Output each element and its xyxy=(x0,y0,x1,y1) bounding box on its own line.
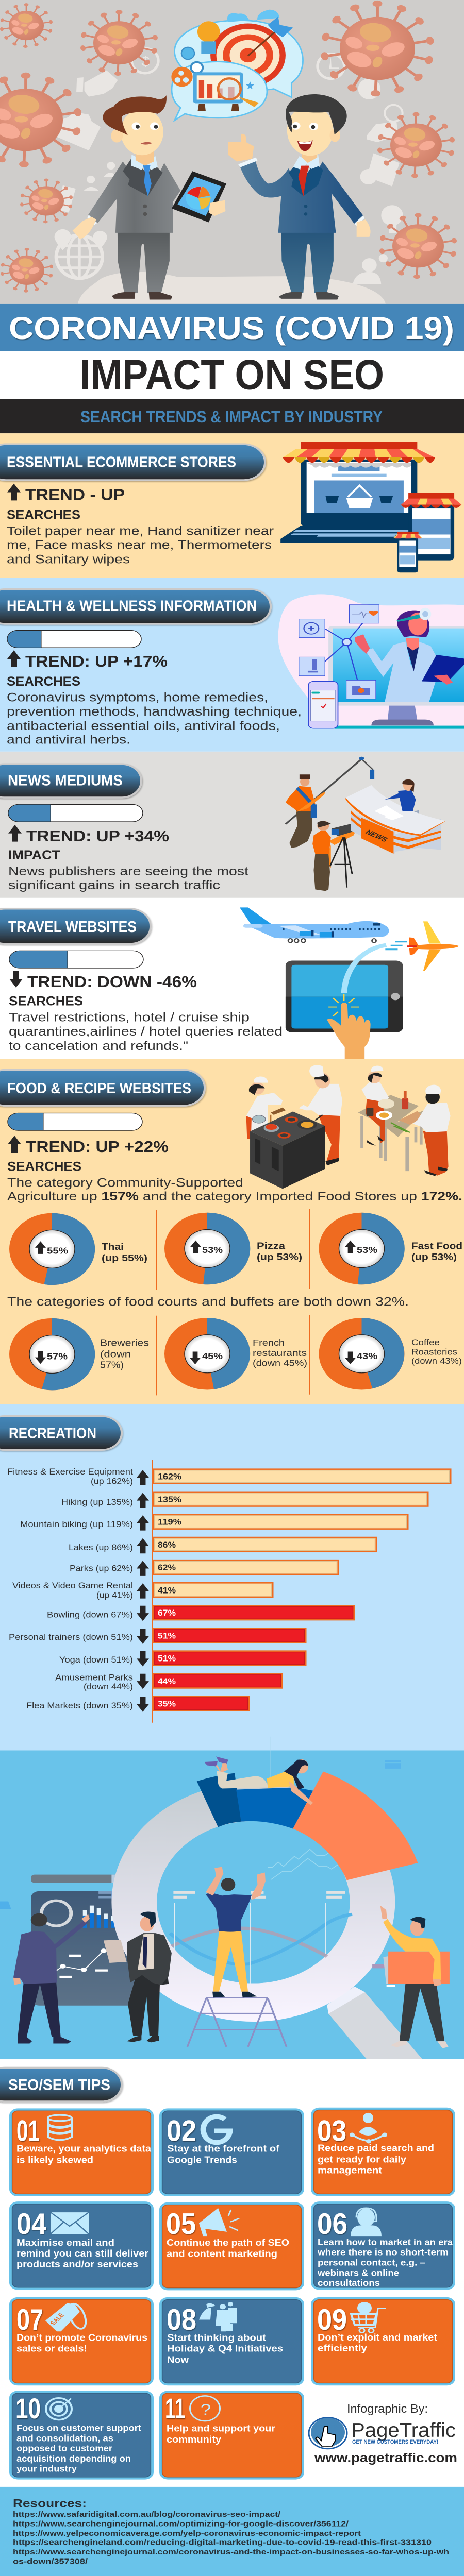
donut: French restaurants: restaurants xyxy=(253,1348,307,1358)
bar chart: Hiking (up 135%) xyxy=(61,1497,133,1507)
bar chart: 51% xyxy=(158,1653,176,1663)
panel: resources: https://www.yelpeconomicaverage.com/yelp-coronavirus-economic-impact-report xyxy=(13,2529,361,2537)
tip 01: is likely skewed xyxy=(16,2155,93,2165)
icon: megaphone xyxy=(199,2208,239,2236)
icon: chefs cooking xyxy=(246,1065,451,1189)
donut: French restaurants: French xyxy=(253,1337,285,1348)
text: food courts: The categories of food courts and buffets are both down 32%. xyxy=(7,1295,409,1309)
heading pill xyxy=(0,1070,205,1106)
figure: man on ladder xyxy=(187,1867,287,2047)
icon: target xyxy=(46,2398,72,2420)
icon: news crew and desk xyxy=(286,757,445,891)
tip 02 xyxy=(161,2110,303,2195)
panel: magnifier illustration xyxy=(0,1737,464,2059)
bar chart xyxy=(7,1460,451,1723)
icon: sale tag xyxy=(45,2302,89,2331)
heading pill: HEALTH & WELLNESS INFORMATION xyxy=(7,598,257,614)
heading pill xyxy=(0,764,141,798)
panel: health and wellness xyxy=(0,578,464,752)
donut: Breweries: (down xyxy=(100,1349,131,1360)
trend: TREND: DOWN -46% xyxy=(27,974,197,991)
donut: Coffee Roasteries xyxy=(319,1318,462,1389)
tip 01 xyxy=(10,2110,153,2195)
searches text: to cancelation and refunds." xyxy=(9,1039,188,1053)
tip 03: management xyxy=(318,2165,382,2176)
tip 03: get ready for daily xyxy=(318,2155,407,2165)
heading pill xyxy=(0,444,265,480)
heading pill: FOOD & RECIPE WEBSITES xyxy=(7,1080,191,1096)
heading pill: RECREATION xyxy=(9,1425,96,1442)
icon: online store devices xyxy=(280,442,461,572)
bar chart: Mountain biking (up 119%) xyxy=(20,1519,133,1529)
bar chart: (up 162%) xyxy=(91,1476,133,1486)
tip 07: Don’t promote Coronavirus xyxy=(16,2333,147,2343)
tip 02: Google Trends xyxy=(167,2155,237,2165)
searches text: Travel restrictions, hotel / cruise ship xyxy=(9,1010,250,1024)
donut: Breweries: 57%) xyxy=(100,1360,124,1370)
panel: resources: https://www.searchenginejournal.com/optimizing-for-google-discover/356112/ xyxy=(13,2519,349,2528)
panel: essential ecommerce stores xyxy=(0,433,464,578)
bar chart: 41% xyxy=(158,1585,176,1595)
tip 06: consultations xyxy=(318,2278,380,2289)
tip 05: 05 xyxy=(166,2208,196,2241)
figure: man at dashboard xyxy=(13,1913,90,2043)
searches text: SEARCHES xyxy=(7,1159,81,1174)
tip 07: sales or deals! xyxy=(16,2344,87,2354)
donut: Pizza xyxy=(164,1213,302,1284)
donut: Thai: 55% xyxy=(47,1246,68,1256)
donut: Breweries: Breweries xyxy=(100,1338,149,1348)
bar chart: 119% xyxy=(158,1517,181,1527)
tip 10: Focus on customer support xyxy=(16,2423,142,2433)
tip 04: Maximise email and xyxy=(16,2238,114,2248)
tip 04: remind you can still deliver xyxy=(16,2248,148,2259)
searches text: Agriculture up 157% and the category Imported Food Stores up 172%. xyxy=(7,1189,462,1204)
bar chart: Fitness & Exercise Equipment xyxy=(7,1467,133,1477)
icon: envelope xyxy=(51,2212,89,2234)
searches text: and Sanitary wipes xyxy=(7,552,130,566)
bar chart: Flea Markets (down 35%) xyxy=(26,1700,133,1710)
searches text: and antiviral herbs. xyxy=(7,733,130,747)
donut: Fast Food xyxy=(319,1213,462,1284)
bar chart: 86% xyxy=(158,1540,176,1550)
bar chart: Parks (up 62%) xyxy=(70,1563,133,1573)
tip 08: Holiday & Q4 Initiatives xyxy=(167,2344,283,2354)
trend: TREND: UP +34% xyxy=(26,827,169,845)
figure: man with orange box xyxy=(380,1906,450,2048)
tip 06: 06 xyxy=(317,2208,347,2241)
searches text: SEARCHES xyxy=(7,674,80,689)
tip 11: 11 xyxy=(165,2393,185,2425)
bar chart: 44% xyxy=(158,1676,176,1686)
searches text xyxy=(9,994,283,1053)
tip 10: and consolidation, as xyxy=(16,2433,113,2444)
searches text xyxy=(7,1159,462,1204)
bar chart: (up 41%) xyxy=(96,1590,133,1600)
icon: question mark: ? xyxy=(201,2401,211,2419)
icon: support doctor xyxy=(351,2208,382,2236)
figure: left businessman xyxy=(73,95,226,300)
figure: man with tablet xyxy=(104,1912,172,2042)
searches text: SEARCHES xyxy=(9,994,83,1008)
icon: plane and tablet xyxy=(240,907,459,1059)
tip 05: Continue the path of SEO xyxy=(167,2238,289,2248)
tip 03: 03 xyxy=(317,2115,346,2147)
chart: dashboard xyxy=(31,1875,145,2006)
tip 07 xyxy=(10,2298,153,2384)
tip 09: efficiently xyxy=(318,2343,368,2353)
donut: Coffee Roasteries: Coffee xyxy=(411,1337,440,1347)
heading pill xyxy=(0,909,151,944)
logo: PageTraffic credit: Infographic By: xyxy=(347,2402,428,2416)
tip 11: Help and support your xyxy=(167,2424,275,2434)
searches text xyxy=(7,674,302,747)
impact text: significant gains in search traffic xyxy=(8,878,220,892)
tip 10: acquisition depending on xyxy=(16,2454,131,2464)
donut: Coffee Roasteries: Roasteries xyxy=(411,1347,457,1357)
panel: hero xyxy=(0,0,464,304)
donut: Coffee Roasteries: 43% xyxy=(357,1351,377,1361)
impact text: IMPACT xyxy=(8,848,60,862)
subtitle band xyxy=(0,399,464,433)
tip 06: webinars & online xyxy=(317,2268,399,2278)
tip 06: personal contact, e.g. – xyxy=(318,2258,425,2268)
donut sectors on magnifier xyxy=(197,1771,418,1880)
trend: TREND: UP +22% xyxy=(26,1139,169,1156)
tip 10: 10 xyxy=(15,2393,41,2425)
heading pill xyxy=(0,589,271,624)
tip 11: community xyxy=(167,2435,222,2445)
icon: virus cells xyxy=(0,1,457,293)
tip 08: 08 xyxy=(167,2303,196,2336)
tip 08 xyxy=(161,2298,303,2384)
donut: French restaurants xyxy=(164,1318,307,1389)
tip 10 xyxy=(10,2392,153,2479)
panel: resources xyxy=(0,2487,464,2576)
searches text: Toilet paper near me, Hand sanitizer near xyxy=(7,524,274,538)
bar chart: 51% xyxy=(158,1631,176,1640)
heading pill: NEWS MEDIUMS xyxy=(8,772,123,789)
donut: Pizza: Pizza xyxy=(257,1241,286,1251)
bar chart: 135% xyxy=(158,1494,181,1504)
progress bar xyxy=(8,1113,142,1130)
bar chart: 62% xyxy=(158,1562,176,1572)
icon: shopping cart xyxy=(351,2302,386,2333)
donut: Pizza: 53% xyxy=(202,1245,223,1255)
panel: food and recipe websites xyxy=(0,1059,464,1404)
tip 11 xyxy=(161,2392,303,2479)
tip 04: 04 xyxy=(16,2208,46,2241)
tip 10: your industry xyxy=(16,2464,77,2474)
heading pill: SEO/SEM TIPS xyxy=(8,2076,110,2093)
tip 02: 02 xyxy=(167,2115,196,2147)
bar chart: Bowling (down 67%) xyxy=(47,1609,133,1619)
icon: logo hand xyxy=(309,2417,347,2449)
bar chart: Videos & Video Game Rental xyxy=(12,1581,133,1590)
searches text: quarantines,airlines / hotel queries related xyxy=(9,1024,283,1039)
progress bar xyxy=(8,804,143,822)
icon: news crew and desk: NEWS xyxy=(363,828,390,843)
trend: TREND - UP xyxy=(25,486,125,504)
donut: Thai xyxy=(9,1213,147,1285)
tip 08: Now xyxy=(167,2355,189,2365)
icon: database xyxy=(48,2115,72,2140)
searches text: The category Community-Supported xyxy=(7,1176,243,1190)
trend xyxy=(7,484,125,504)
bar chart: 67% xyxy=(158,1608,176,1618)
searches text: SEARCHES xyxy=(7,507,80,522)
donut: Thai: Thai xyxy=(102,1242,124,1252)
tip 02: Stay at the forefront of xyxy=(167,2144,279,2154)
panel: recreation xyxy=(0,1404,464,1750)
icon: holiday travellers xyxy=(199,2302,237,2331)
tip 10: opposed to customer xyxy=(16,2444,112,2454)
donut: Fast Food: Fast Food xyxy=(411,1241,462,1251)
heading pill: TRAVEL WEBSITES xyxy=(8,919,137,936)
panel: resources: https://www.safaridigital.com.au/blog/coronavirus-seo-impact/ xyxy=(13,2510,280,2519)
background faint icons: $ xyxy=(141,54,150,69)
tip 05 xyxy=(161,2204,303,2289)
tip 04: products and/or services xyxy=(16,2259,138,2269)
dividers xyxy=(156,1209,309,1395)
icon: online doctor xyxy=(278,594,464,729)
impact text xyxy=(8,848,249,892)
bar chart: Yoga (down 51%) xyxy=(59,1654,133,1665)
icon: Google G xyxy=(203,2116,230,2143)
bar chart: Lakes (up 86%) xyxy=(69,1543,133,1552)
tip 06 xyxy=(312,2202,454,2289)
tip 07: 07 xyxy=(16,2303,43,2336)
tip 01: Beware, your analytics data xyxy=(16,2144,152,2154)
figure: right businessman xyxy=(228,94,371,300)
bar chart: 162% xyxy=(158,1471,181,1481)
donut: Fast Food: 53% xyxy=(357,1245,377,1255)
heading pill xyxy=(0,1416,122,1450)
panel: resources: os-down/357308/ xyxy=(13,2557,88,2566)
icon: network person xyxy=(350,2113,387,2144)
figure: woman lying xyxy=(204,1756,313,1805)
panel: resources: https://www.searchenginejournal.com/coronavirus-and-the-impact-on-businesses-so-far-whos-up-wh xyxy=(13,2547,449,2556)
donut: French restaurants: 45% xyxy=(202,1351,223,1361)
donut: Fast Food: (up 53%) xyxy=(411,1252,457,1263)
panel: resources: https://searchengineland.com/reducing-digital-marketing-due-to-covid-19-read-this-first-331310 xyxy=(13,2538,432,2547)
tip 09 xyxy=(312,2298,454,2384)
heading pill xyxy=(0,2067,122,2102)
panel: travel websites xyxy=(0,898,464,1059)
donut: Breweries: 57% xyxy=(47,1351,68,1362)
bar chart: 35% xyxy=(158,1699,176,1708)
tip 03 xyxy=(312,2109,454,2195)
bar chart: (down 44%) xyxy=(84,1682,133,1691)
searches text: me, Face masks near me, Thermometers xyxy=(7,538,272,552)
tip 06: where there is no short-term xyxy=(317,2247,449,2258)
icon: question mark xyxy=(190,2396,220,2421)
tip 08: Start thinking about xyxy=(167,2333,266,2343)
panel: SEO/SEM tips xyxy=(0,2059,464,2487)
background faint icons xyxy=(55,48,403,284)
icon: sale tag: SALE xyxy=(48,2311,65,2327)
searches text: Coronavirus symptoms, home remedies, xyxy=(7,690,268,704)
donut: French restaurants: (down 45%) xyxy=(253,1358,307,1368)
tip 01: 01 xyxy=(16,2115,40,2147)
impact text: News publishers are seeing the most xyxy=(8,864,249,878)
donut: Thai: (up 55%) xyxy=(102,1253,147,1263)
tip 03: Reduce paid search and xyxy=(318,2143,434,2154)
progress bar xyxy=(7,631,141,648)
heading pill: ESSENTIAL ECOMMERCE STORES xyxy=(7,454,236,470)
searches text: antibacterial essential oils, antiviral foods, xyxy=(7,719,280,733)
tip 05: and content marketing xyxy=(167,2249,277,2259)
bar chart: Personal trainers (down 51%) xyxy=(9,1632,133,1642)
donut: Breweries xyxy=(9,1318,149,1390)
tip 09: 09 xyxy=(317,2303,347,2336)
icon: thought bubbles xyxy=(171,10,303,121)
ground shape xyxy=(78,272,386,304)
tip 09: Don’t exploit and market xyxy=(318,2332,437,2343)
bar chart: Amusement Parks xyxy=(55,1672,133,1682)
progress bar xyxy=(9,951,143,968)
searches text: prevention methods, handwashing technique, xyxy=(7,704,302,719)
panel: resources: Resources: xyxy=(13,2497,87,2510)
logo: PageTraffic credit xyxy=(309,2402,457,2465)
searches text xyxy=(7,507,274,566)
panel: news mediums xyxy=(0,752,464,898)
trend: TREND: UP +17% xyxy=(25,653,168,670)
icon: magnifier ring xyxy=(111,1783,423,2059)
tip 04 xyxy=(10,2202,153,2289)
donut: Pizza: (up 53%) xyxy=(257,1252,302,1263)
